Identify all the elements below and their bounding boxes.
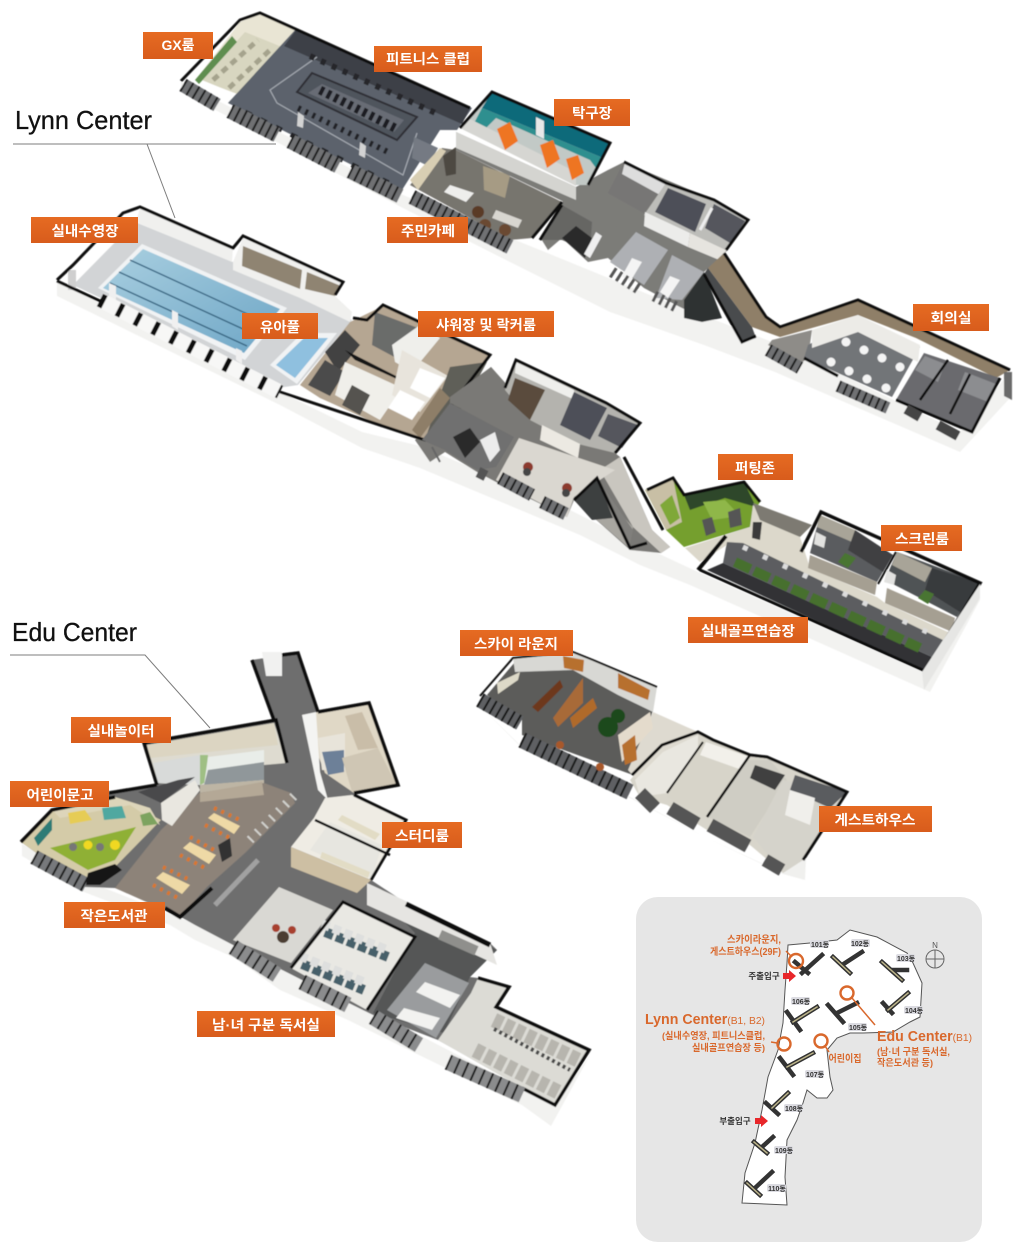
text: Lynn Center callout: Lynn Center(B1, B2) [645, 1012, 765, 1028]
label: study room [382, 822, 462, 848]
title: Edu Center [10, 617, 210, 728]
title: Edu Center: Edu Center [12, 617, 137, 647]
label: shower and locker room [418, 311, 554, 337]
corridor [195, 652, 344, 937]
room: lobby with red chairs [496, 438, 615, 517]
label: indoor playground [71, 717, 171, 743]
label: indoor playground: 실내놀이터 [88, 723, 154, 739]
building number labels: 110동 [768, 1185, 786, 1193]
building silhouette [21, 653, 589, 1105]
building number labels: 104동 [905, 1007, 924, 1015]
label: indoor swimming pool: 실내수영장 [52, 223, 119, 239]
room: study rooms [291, 795, 406, 893]
title: Lynn Center [13, 105, 276, 218]
corridor: lower level [450, 367, 670, 553]
room: guest house units [618, 712, 847, 873]
room: lounge and toilets lower [505, 360, 640, 458]
label: reading rooms: 남·녀 구분 독서실 [212, 1017, 320, 1033]
floor plan: Lynn Center lower level [57, 207, 980, 692]
room: shower and locker room [280, 305, 490, 440]
floor plan: Edu Center [21, 652, 590, 1126]
text: daycare: 어린이집 [828, 1053, 862, 1065]
label: conference room: 회의실 [930, 310, 972, 326]
floor plan: Lynn Center upper level [181, 13, 1012, 452]
white building base [57, 282, 980, 692]
text: sky lounge callout [710, 933, 781, 958]
icon: north compass: N [932, 941, 938, 950]
room: corridor to reading rooms [367, 883, 497, 1033]
pool walls [57, 207, 343, 392]
text: sky lounge callout: 스카이라운지, [727, 933, 781, 946]
room: reading room with carrels [291, 902, 415, 1010]
site outline [742, 930, 922, 1205]
label: fitness club: 피트니스 클럽 [386, 51, 470, 67]
label: indoor swimming pool [31, 217, 138, 243]
room: kiddie pool [270, 333, 337, 384]
label: study room: 스터디룸 [395, 828, 449, 844]
stairs lower level [574, 478, 647, 548]
leader line: Edu Center [10, 655, 210, 728]
room: GX room [195, 14, 299, 95]
text: main entrance: 주출입구 [748, 971, 780, 981]
label: small library: 작은도서관 [80, 908, 148, 924]
leader line: Lynn Center [13, 144, 276, 218]
location markers [771, 951, 875, 1052]
building silhouette right wing [540, 162, 748, 318]
room: reading room with tables [373, 963, 469, 1045]
label: children's library [10, 781, 109, 807]
icon: north compass [926, 941, 944, 968]
building number labels: 105동 [849, 1024, 868, 1032]
room: small library [115, 782, 295, 917]
white building base [22, 844, 590, 1126]
text: Lynn Center callout: (실내수영장, 피트니스클럽, [662, 1030, 765, 1042]
icon: sub entrance arrow [755, 1115, 768, 1127]
label: GX room: GX룸 [161, 37, 195, 53]
building number labels: 102동 [851, 940, 870, 948]
label: kiddie pool [242, 313, 318, 339]
room: fitness club [228, 30, 472, 190]
rooms: screen rooms [801, 512, 980, 690]
text: Edu Center callout: (남·녀 구분 독서실, [877, 1046, 950, 1058]
room: indoor playground [144, 720, 287, 800]
room: reading room end [438, 978, 589, 1105]
white building base [181, 82, 1010, 452]
room: lounge and toilets upper [608, 162, 748, 262]
label: table tennis: 탁구장 [572, 105, 612, 121]
floor plan: Sky lounge and guest house [480, 652, 847, 880]
building number labels: 103동 [897, 955, 916, 963]
text: sub entrance: 부출입구 [719, 1116, 751, 1126]
building number labels: 106동 [792, 998, 811, 1006]
room: conference room [768, 315, 920, 408]
label: putting zone [718, 454, 793, 480]
room: residents cafe [410, 147, 562, 247]
text: Edu Center callout: 작은도서관 등) [877, 1057, 933, 1069]
building number labels: 107동 [806, 1071, 825, 1079]
room: elevator lobby [422, 403, 514, 476]
label: indoor golf range [688, 617, 808, 643]
label: guest house: 게스트하우스 [834, 812, 916, 828]
building silhouette centre [415, 367, 670, 553]
label: GX room [143, 32, 213, 59]
label: screen room [881, 525, 962, 551]
room: children's library [21, 777, 200, 887]
room: indoor golf practice range [685, 503, 950, 672]
text: Lynn Center callout: 실내골프연습장 등) [692, 1042, 765, 1054]
label: conference room [913, 304, 989, 331]
room: putting zone [645, 478, 760, 547]
label: children's library: 어린이문고 [26, 787, 94, 803]
rooms: right end [896, 353, 1012, 436]
room: toilets [302, 703, 398, 800]
building number labels [767, 939, 924, 1193]
label: residents cafe [387, 217, 468, 243]
text: sky lounge callout: 게스트하우스(29F) [710, 945, 781, 958]
stairs and diagonal link [684, 253, 1010, 378]
label: putting zone: 퍼팅존 [735, 460, 775, 476]
label: reading rooms [197, 1011, 335, 1037]
text: Lynn Center callout [645, 1012, 765, 1054]
text: Edu Center callout [877, 1029, 972, 1069]
label: kiddie pool: 유아풀 [260, 319, 300, 335]
apartment buildings [747, 952, 908, 1195]
room: reading room lobby [233, 887, 333, 975]
icon: main entrance arrow [783, 970, 796, 982]
windows: upper front [183, 85, 400, 196]
label: indoor golf range: 실내골프연습장 [701, 623, 795, 639]
label: guest house [819, 806, 932, 832]
building number labels: 109동 [775, 1147, 794, 1155]
corridor: upper level [456, 132, 724, 268]
label: residents cafe: 주민카페 [401, 223, 455, 239]
label: fitness club [374, 46, 482, 72]
title: Lynn Center: Lynn Center [15, 105, 152, 135]
label: shower and locker room: 샤워장 및 락커룸 [436, 317, 536, 333]
room: lower rooms upper level [540, 205, 704, 308]
building number labels: 108동 [785, 1105, 804, 1113]
room: indoor swimming pool [68, 208, 352, 388]
label: sky lounge: 스카이 라운지 [474, 636, 558, 652]
label: screen room: 스크린룸 [895, 531, 949, 547]
text: Edu Center callout: Edu Center(B1) [877, 1029, 972, 1045]
panel: site map [636, 897, 982, 1242]
room: table tennis [460, 92, 610, 186]
label: sky lounge [460, 630, 573, 656]
white building base [480, 706, 806, 880]
room: sky lounge [480, 652, 657, 792]
building silhouette guest house [630, 732, 847, 873]
label: table tennis [554, 99, 630, 126]
upper walls [181, 13, 470, 108]
label: small library [64, 902, 165, 928]
building number labels: 101동 [811, 941, 830, 949]
